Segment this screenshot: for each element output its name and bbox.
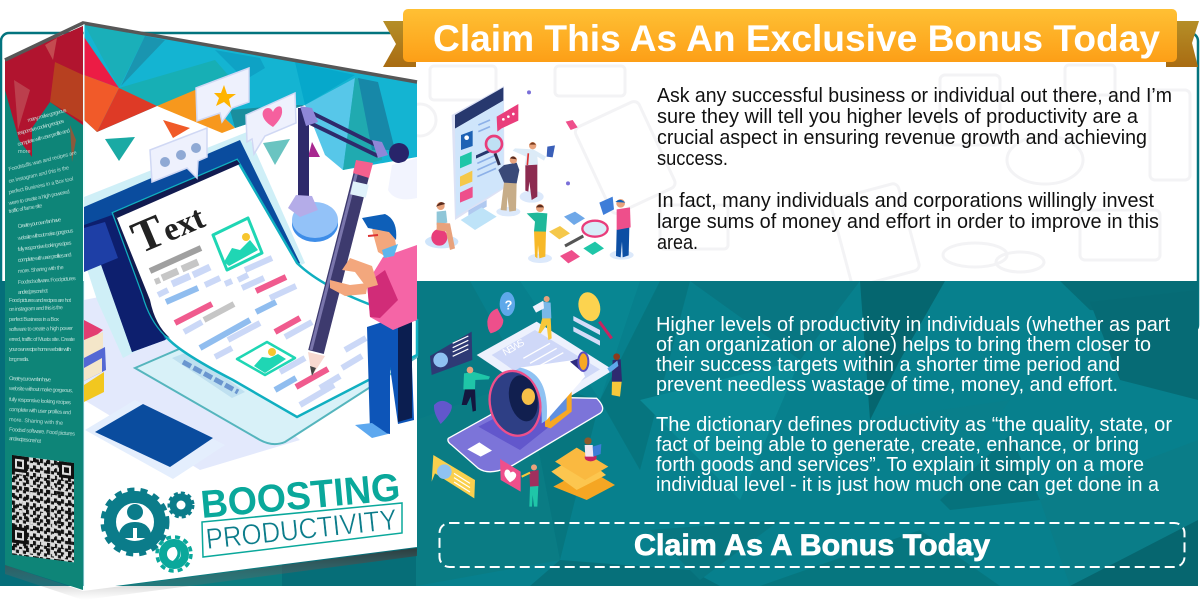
illustration: desk lamp [288, 106, 417, 242]
box left teal face [5, 26, 83, 590]
box side small print: software to create a high power [9, 326, 73, 333]
upper paragraph text: sure they will tell you higher levels of productivity are a [657, 106, 1139, 128]
box side small print: on instagram and this is the [8, 165, 70, 185]
upper paragraph text: Ask any successful business or individual out there, and I’m [657, 85, 1172, 107]
box side small print: website without make gorgeous, [8, 386, 74, 394]
illustration: team around phone app [425, 86, 634, 263]
ribbon: banner left tail [383, 21, 416, 67]
man in green shirt [527, 204, 547, 258]
box side small print: traffic of fame site [8, 203, 43, 215]
woman with tablet [607, 353, 622, 397]
paper image card top [213, 218, 262, 270]
background: faint finance line icons [404, 65, 1190, 288]
box side small print: complete with user profiles and [9, 407, 71, 416]
box shadow [5, 548, 417, 600]
illustration: star chat bubble [196, 68, 249, 122]
product box [5, 23, 417, 600]
logo: PRODUCTIVITY wordmark: PRODUCTIVITY [204, 504, 399, 556]
upper paragraph text: success. [657, 148, 728, 170]
twitter speech bubble [430, 332, 472, 375]
illustration: man writing [330, 214, 417, 438]
stacked envelopes with woman [551, 437, 615, 500]
box side small print: were to create a high powered [7, 189, 70, 207]
paper text lines [150, 248, 366, 405]
title banner [403, 9, 1177, 62]
box side small print: Create your own fan have [9, 376, 51, 383]
upper paragraph text: large sums of money and effort in order to improve in this [657, 211, 1159, 233]
upper paragraph text: area. [657, 232, 698, 254]
ribbon: banner right tail [1166, 21, 1199, 67]
question chat bubbles [487, 292, 515, 333]
upper paragraph text [657, 85, 1172, 254]
paper heading: Text [124, 188, 211, 263]
illustration: stack of books [84, 320, 106, 402]
illustration: marketing megaphone scene [430, 290, 622, 507]
box front face [84, 23, 417, 590]
box side small print: fully responsive looking recipes [18, 240, 72, 253]
man in suit [498, 156, 519, 212]
news tablet: NEWS [501, 337, 527, 359]
QR code [12, 455, 74, 562]
box side small print: website without make gorgeous [16, 228, 74, 242]
paper image card bottom [237, 342, 295, 375]
illustration: tablet on desk [85, 400, 225, 479]
box side small print: complete with user profile and [17, 128, 71, 148]
box side small print: Food pictures and recipes are hot [9, 298, 71, 304]
illustration: laptop lid [84, 132, 305, 358]
question chat bubbles: ? [505, 298, 512, 312]
box side small print: more. Sharing with the [9, 417, 63, 427]
box side small print [7, 108, 77, 445]
lower paragraph text: The dictionary defines productivity as “the quality, state, or [656, 414, 1172, 436]
thumbs up bubble [432, 455, 475, 498]
illustration: curved paper sheet [113, 160, 417, 417]
seated woman [425, 202, 458, 250]
box side small print: Foodstuffs was and recipes are [8, 150, 77, 173]
illustration: laptop screen [84, 140, 300, 352]
title text: Claim This As An Exclusive Bonus Today [433, 18, 1160, 59]
box side small print: more [18, 149, 31, 155]
box side small print: and recipes one hot [9, 436, 42, 445]
illustration: dots chat bubble [150, 128, 207, 182]
lower paragraph text [656, 314, 1172, 496]
lower paragraph text: prevent needless wastage of time, money, and effort. [656, 374, 1118, 396]
man pointing at megaphone [462, 367, 490, 412]
ground shadows [496, 191, 634, 263]
decorative triangles [105, 120, 320, 165]
box side small print: and recipes one hot [18, 288, 49, 296]
box side small print: fully responsive looking recipes [9, 397, 71, 406]
floating tiles and magnifier [549, 212, 608, 263]
box side small print: Foodsd software. Food pictures [9, 427, 75, 438]
phone [452, 86, 504, 220]
box left red polygons [5, 26, 83, 162]
box side small print: more. Sharing with the [18, 265, 64, 275]
man with laptop [599, 197, 631, 257]
box side small print: complete with user profiles and [18, 252, 72, 264]
box side small print: erred, traffic of Musts site. Create [9, 337, 75, 343]
box side small print: your own recipe home website with [9, 347, 71, 353]
lower paragraph text: their success targets within a shorter time period and [656, 354, 1120, 376]
upper paragraph text: In fact, many individuals and corporations willingly invest [657, 190, 1154, 212]
magnifier with lines [573, 290, 612, 346]
box top edge [5, 23, 417, 82]
box side small print: perfect Business in a Box tool [8, 176, 74, 196]
illustration: surface behind laptop [84, 290, 300, 470]
pink chat bubble [497, 104, 518, 132]
box corner highlight [83, 24, 85, 590]
box side small print: Foodsd software. Food pictures [18, 276, 76, 286]
megaphone [484, 352, 588, 440]
lower paragraph text: Higher levels of productivity in individuals (whether as part [656, 314, 1170, 336]
lower paragraph text: fact of being able to generate, create, enhance, or bring [656, 434, 1139, 456]
panel: bottom teal low-poly section [0, 281, 1198, 586]
logo: gears [103, 490, 193, 571]
purple phone [448, 397, 603, 472]
illustration: giant pencil [308, 160, 373, 376]
heart card and man [500, 459, 539, 507]
box side small print: Create your own fan have [17, 217, 62, 230]
box side small print: responsive cooking recipes [17, 119, 65, 137]
lower paragraph text: forth goods and services”. To explain it simply on a more [656, 454, 1144, 476]
illustration: keyboard base [135, 340, 417, 444]
man with laptop on tablet [533, 296, 552, 340]
news tablet [477, 322, 613, 407]
man in white shirt [513, 142, 555, 200]
lower paragraph text: of an organization or alone) helps to bring them closer to [656, 334, 1151, 356]
phone base card [461, 207, 497, 230]
location pin [434, 401, 452, 424]
box side small print: perfect Business in a Box [9, 317, 59, 323]
logo: BOOSTING wordmark: BOOSTING [199, 466, 402, 527]
box front polygon header [84, 24, 417, 170]
illustration: heart chat bubble [246, 93, 296, 154]
call to action button [440, 523, 1184, 567]
box side small print: long media. [9, 357, 29, 363]
upper paragraph text: crucial aspect in ensuring revenue growth and achieving [657, 127, 1147, 149]
lower paragraph text: individual level - it is just how much one can get done in a [656, 474, 1160, 496]
box side small print: many. make gorgeous [27, 108, 67, 124]
magnifier [486, 136, 502, 165]
panel: outer white content frame [1, 33, 1198, 333]
box side small print: on instagram and this is the [9, 305, 63, 313]
accent dots [527, 90, 570, 185]
call to action label: Claim As A Bonus Today [634, 529, 990, 562]
small pink badge [566, 120, 578, 130]
